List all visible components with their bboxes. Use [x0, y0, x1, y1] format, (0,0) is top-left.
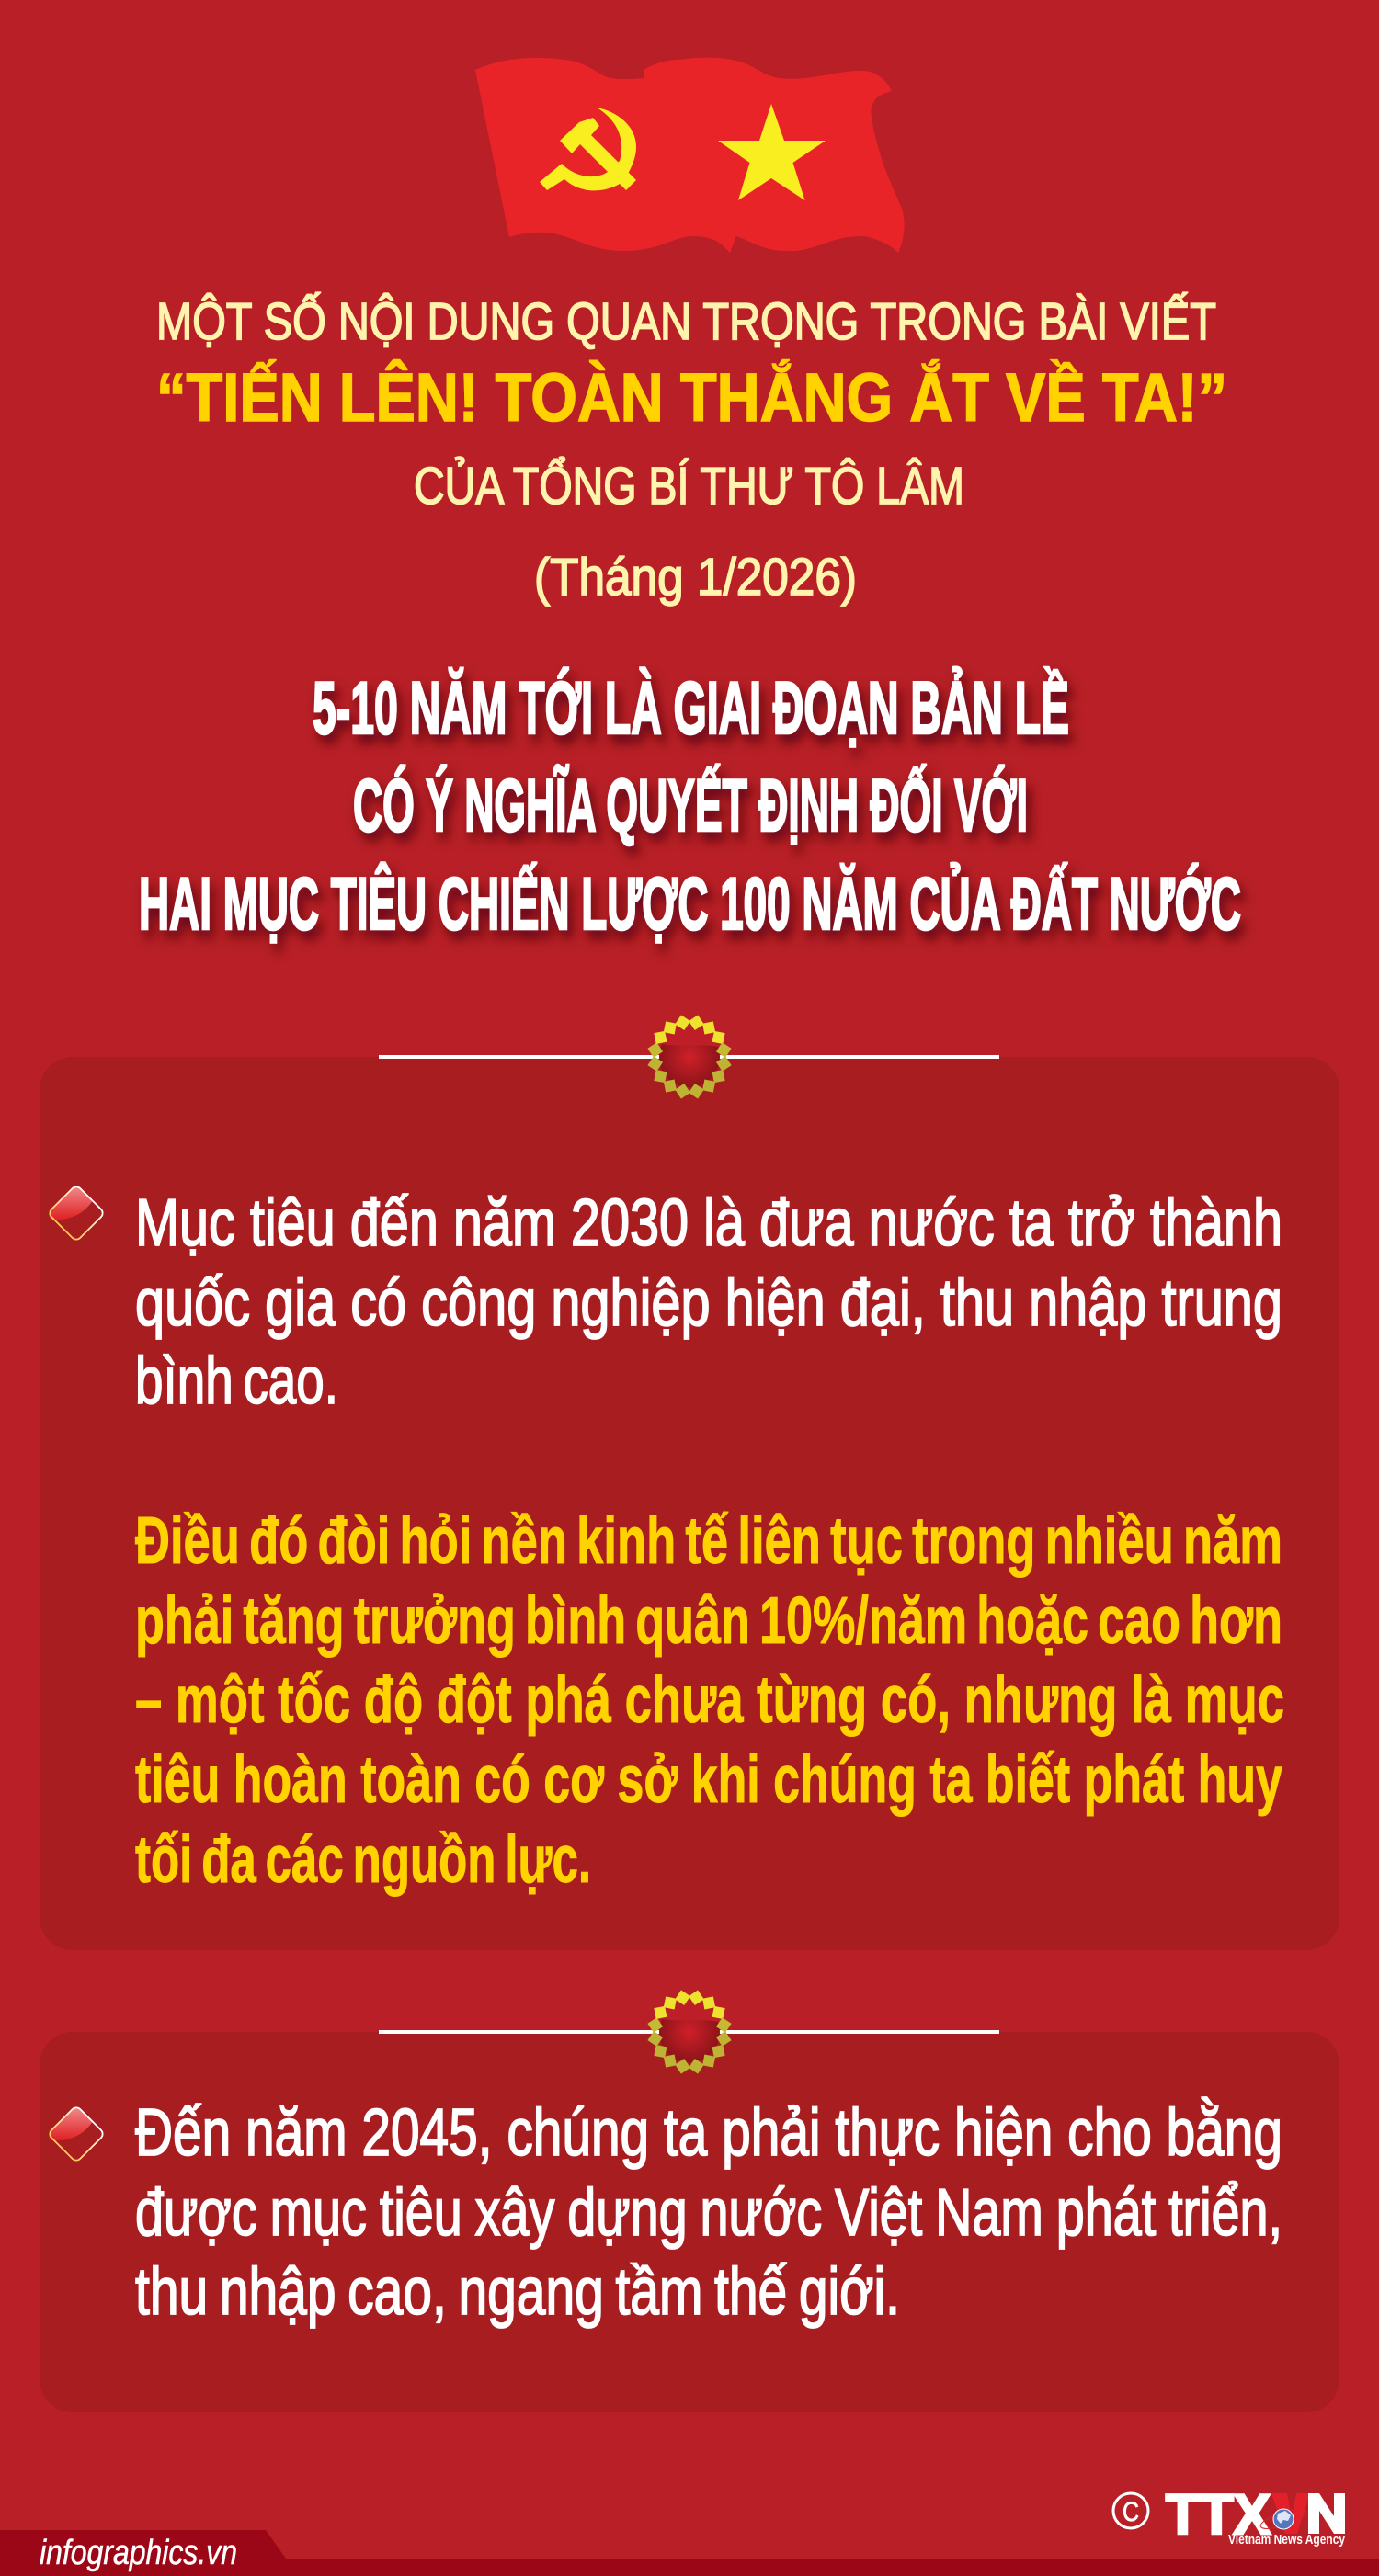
white text — [135, 1186, 1282, 1418]
icon: star — [718, 104, 826, 200]
white text: thu nhập cao, ngang tầm thế giới. — [135, 2255, 900, 2329]
logo: TTXVN — [1113, 2483, 1346, 2548]
title block — [156, 291, 1227, 607]
copyright mark — [1113, 2493, 1148, 2528]
letter V — [1271, 2493, 1310, 2534]
icon: diamond bullet — [48, 2105, 105, 2162]
headline — [139, 666, 1241, 946]
icon: diamond bullet — [48, 1185, 105, 1242]
agency name: Vietnam News Agency — [1228, 2532, 1346, 2548]
divider ornament — [379, 1015, 999, 1099]
white text: bình cao. — [135, 1345, 338, 1418]
panel: goal 2030 — [40, 1015, 1339, 1950]
letter N — [1308, 2493, 1345, 2534]
date: (Tháng 1/2026) — [534, 548, 857, 607]
footer band — [0, 2530, 1379, 2576]
source website: infographics.vn — [40, 2534, 237, 2572]
white text — [135, 2096, 1282, 2329]
icon: hammer and sickle — [540, 108, 636, 190]
flag — [475, 58, 905, 253]
yellow text: tối đa các nguồn lực. — [135, 1823, 591, 1897]
yellow text — [135, 1504, 1284, 1897]
panel: goal 2045 — [40, 1990, 1339, 2412]
title line 2: article name: “TIẾN LÊN! TOÀN THẮNG ẮT VỀ TA!” — [156, 359, 1227, 436]
divider ornament — [379, 1990, 999, 2074]
copyright mark: C — [1123, 2497, 1139, 2527]
letters TTX: TTX — [1166, 2483, 1271, 2546]
globe — [1259, 2505, 1308, 2533]
title line 3: author: CỦA TỔNG BÍ THƯ TÔ LÂM — [414, 456, 964, 516]
